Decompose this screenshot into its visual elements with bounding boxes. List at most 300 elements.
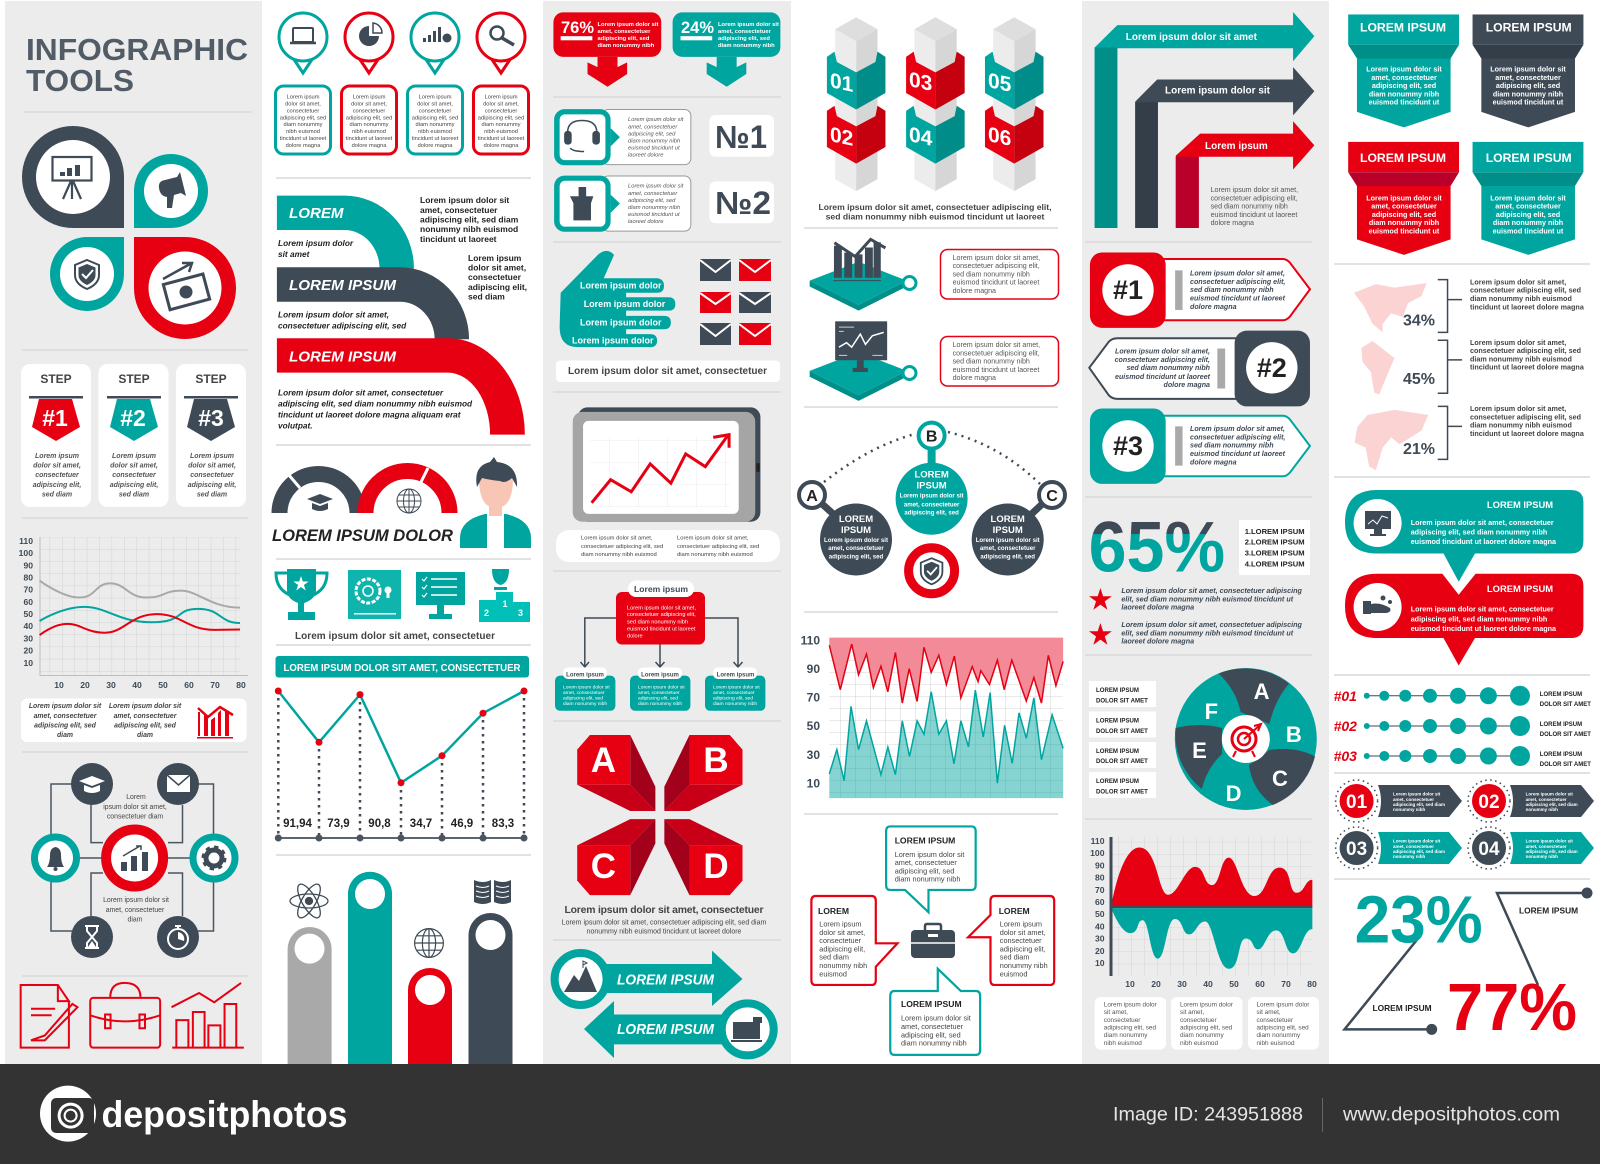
podium speaker card: amet, consectetuer xyxy=(628,191,678,197)
bent arrows: Lorem ipsum dolor sit amet xyxy=(1126,32,1258,43)
box 3 xyxy=(408,86,462,154)
banner dark: amet, consectetuer xyxy=(1495,73,1561,82)
callout 76%: 76% xyxy=(561,19,594,37)
box 4: tincidunt ut laoreet xyxy=(478,136,525,142)
ranked tag #1: euismod tincidunt ut laoreet xyxy=(1190,294,1286,302)
ABCD 3D blocks: D xyxy=(703,847,729,886)
podium speaker card: laoreet dolore xyxy=(628,219,664,225)
box 1: tincidunt ut laoreet xyxy=(280,136,327,142)
wave chart: 20 xyxy=(1095,946,1105,956)
tag 03: adipiscing elit, sed diam xyxy=(1393,849,1445,854)
icon: megaphone xyxy=(134,154,208,228)
box 4: consectetuer xyxy=(485,108,517,114)
ribbon body text: Lorem ipsum dolor sit xyxy=(420,195,509,205)
arches with person xyxy=(272,457,531,548)
node A: A xyxy=(806,488,818,505)
bubble bottom text: LOREM IPSUM xyxy=(901,999,962,1009)
text box: bar chart note: dolore magna xyxy=(953,287,996,295)
ribbon labels: LOREM IPSUM xyxy=(289,277,397,294)
line chart: 50 xyxy=(158,680,168,690)
bubble bottom text xyxy=(901,999,971,1048)
line chart: 20 xyxy=(80,680,90,690)
map statistics: 21% xyxy=(1403,441,1435,458)
wave chart captions: nibh euismod xyxy=(1180,1040,1218,1047)
step 1 card: consectetuer xyxy=(35,472,80,479)
callout: teal: adipiscing elit, sed diam nonummy nibh xyxy=(1411,527,1547,536)
banner teal 1: amet, consectetuer xyxy=(1371,73,1437,82)
area chart: 30 xyxy=(807,748,820,762)
bubble right text: LOREM xyxy=(999,906,1030,916)
wheel labels: DOLOR SIT AMET xyxy=(1096,728,1148,735)
tag 04: nonummy nibh xyxy=(1526,854,1558,859)
org chart head node: dolore xyxy=(627,633,643,639)
org chart child 3: diam nonummy nibh xyxy=(713,701,757,707)
isometric numbered towers: 04 xyxy=(909,123,933,151)
callout 76%: diam nonummy nibh xyxy=(598,43,655,49)
line chart: 60 xyxy=(23,597,33,607)
wheel labels xyxy=(1089,681,1156,798)
title xyxy=(26,32,248,98)
line chart: 30 xyxy=(106,680,116,690)
callout: teal xyxy=(1345,490,1583,582)
chart caption box: adipiscing elit, sed xyxy=(114,722,177,730)
bent arrows: dolore magna xyxy=(1211,219,1254,227)
org chart child 2: Lorem ipsum dolor sit xyxy=(638,684,685,690)
callout 76%: amet, consectetuer xyxy=(598,29,651,35)
dot timelines: #02 xyxy=(1334,718,1357,734)
text box: monitor note: Lorem ipsum dolor sit amet, xyxy=(953,341,1040,349)
wave chart: 60 xyxy=(1095,897,1105,907)
tablet caption strip xyxy=(556,530,780,562)
icon: globe xyxy=(415,929,443,957)
bubble top text: adipiscing elit, sed xyxy=(895,866,954,876)
podium speaker card: Lorem ipsum dolor sit xyxy=(628,184,684,190)
headset card: adipiscing elit, sed xyxy=(628,132,676,138)
wave chart: 80 xyxy=(1095,872,1105,882)
ranked tag #1: Lorem ipsum dolor sit amet, xyxy=(1190,270,1285,278)
wave chart captions: consectetuer xyxy=(1256,1017,1294,1024)
callout: red: adipiscing elit, sed diam nonummy nibh xyxy=(1411,614,1547,623)
org chart child 3: amet, consectetuer xyxy=(713,690,755,696)
ranked tag #3: euismod tincidunt ut laoreet xyxy=(1190,450,1286,458)
box 1: adipiscing elit, sed xyxy=(280,115,326,121)
box 3: diam nonummy xyxy=(416,122,455,128)
ranked tag #2: #2 xyxy=(1257,353,1287,383)
org chart child 3: Lorem ipsum dolor sit xyxy=(713,684,760,690)
chart caption box: adipiscing elit, sed xyxy=(34,722,97,730)
tablet caption strip: diam nonummy nibh euismod xyxy=(581,552,657,558)
callout: teal: Lorem ipsum dolor sit amet, consectetuer xyxy=(1411,518,1554,527)
ribbon labels: LOREM xyxy=(289,205,344,222)
banner dark: LOREM IPSUM xyxy=(1486,21,1572,35)
step 1 card: #1 xyxy=(42,405,68,431)
website url: www.depositphotos.com xyxy=(1342,1104,1560,1126)
wave chart: 20 xyxy=(1151,979,1161,989)
area chart: 10 xyxy=(807,777,820,791)
icon: target xyxy=(1232,724,1261,757)
bubble right text: Lorem ipsum xyxy=(1000,919,1042,928)
wave chart captions: Lorem ipsum dolor xyxy=(1104,1001,1158,1008)
caption strip xyxy=(556,360,780,382)
chart caption box: Lorem ipsum dolor sit xyxy=(109,703,182,710)
tag 01 xyxy=(1336,780,1462,822)
box 2: dolore magna xyxy=(352,143,387,149)
tag 03 xyxy=(1336,827,1462,869)
column 3 xyxy=(553,12,780,1058)
ranked tag #1: #1 xyxy=(1113,275,1143,305)
ribbon italic notes: sit amet xyxy=(278,249,311,259)
banner teal 2: adipiscing elit, sed xyxy=(1496,210,1560,219)
dark pill xyxy=(468,913,512,1064)
callout: teal: euismod tincidunt ut laoreet dolore magna xyxy=(1411,537,1557,546)
map statistics: Lorem ipsum dolor sit amet, xyxy=(1470,404,1566,413)
step 1 card: dolor sit amet, xyxy=(33,463,81,470)
step 3 card: #3 xyxy=(198,405,224,431)
text box: monitor note: consectetuer adipiscing elit, xyxy=(953,350,1040,358)
bubble left text: Lorem ipsum xyxy=(819,919,861,928)
box 4: adipiscing elit, sed xyxy=(478,115,524,121)
chart caption box: amet, consectetuer xyxy=(114,713,177,720)
map statistics: diam nonummy nibh euismod xyxy=(1470,421,1572,430)
hand with finger labels: Lorem ipsum dolor xyxy=(580,281,662,291)
wave chart captions xyxy=(1095,997,1319,1050)
ABCD 3D blocks: C xyxy=(591,847,616,886)
dot timelines: #03 xyxy=(1334,748,1357,764)
bent arrows: sed diam nonummy nibh xyxy=(1211,203,1288,211)
teal heading banner xyxy=(276,656,529,678)
isometric numbered towers: 06 xyxy=(988,123,1012,151)
banner teal 2: diam nonummy nibh xyxy=(1493,218,1563,227)
network diagram: diam xyxy=(128,916,143,924)
tablet caption strip: consectetuer adipiscing elit, sed xyxy=(581,544,663,550)
bubble left text: LOREM xyxy=(818,906,849,916)
dotted line chart: 83,3 xyxy=(492,818,514,830)
title: INFOGRAPHIC xyxy=(26,32,248,67)
petal icons cluster xyxy=(22,126,236,339)
tag 01: nonummy nibh xyxy=(1393,807,1425,812)
line chart: 10 xyxy=(54,680,64,690)
dotted line chart: 46,9 xyxy=(451,818,473,830)
hand with finger labels: Lorem ipsum dolor xyxy=(584,299,666,309)
dot timelines: DOLOR SIT AMET xyxy=(1540,732,1591,738)
ribbon italic notes xyxy=(278,238,473,430)
callout 76%: adipiscing elit, sed xyxy=(598,36,650,42)
banner red: adipiscing elit, sed xyxy=(1372,210,1436,219)
bubble bottom text: Lorem ipsum dolor sit xyxy=(901,1014,971,1022)
line chart: 90 xyxy=(23,560,33,570)
banner teal 1 xyxy=(1348,14,1459,127)
isometric numbered towers: 01 xyxy=(830,69,854,97)
dotted line chart: 34,7 xyxy=(410,818,432,830)
icon: presentation board xyxy=(22,126,124,228)
text box: monitor note: euismod tincidunt ut laoreet xyxy=(953,366,1039,374)
banner red: amet, consectetuer xyxy=(1371,202,1437,211)
org chart child 1: adipiscing elit, sed xyxy=(563,696,603,702)
pill bar chart xyxy=(288,872,512,1064)
node C: Lorem ipsum dolor sit xyxy=(976,537,1040,544)
ribbon body text: tincidunt ut laoreet xyxy=(420,234,497,244)
ranked tag #1 xyxy=(1090,252,1310,328)
step 2 card: sed diam xyxy=(119,492,149,498)
wheel labels: DOLOR SIT AMET xyxy=(1096,698,1148,704)
wave chart captions: diam nonummy xyxy=(1104,1032,1148,1039)
tag 04: 04 xyxy=(1478,839,1500,860)
org chart child 3 xyxy=(705,668,765,711)
chart caption box: amet, consectetuer xyxy=(34,713,97,720)
isometric plate: bar chart xyxy=(810,239,916,311)
ribbon body text: consectetuer xyxy=(468,272,522,282)
ribbon body text: nonummy nibh euismod xyxy=(420,224,518,234)
dot timelines: LOREM IPSUM xyxy=(1540,752,1582,758)
tag 02: amet, consectetuer xyxy=(1526,797,1567,802)
tag 03: Lorem ipsum dolor sit xyxy=(1393,839,1441,844)
headset card: laoreet dolore xyxy=(628,153,664,159)
box 4: nibh euismod xyxy=(484,129,518,135)
banner teal 2: amet, consectetuer xyxy=(1495,202,1561,211)
podium speaker card: euismod tincidunt ut xyxy=(628,212,680,218)
hand with finger labels: Lorem ipsum dolor xyxy=(580,318,662,328)
icon: envelope xyxy=(157,763,199,805)
text box: bar chart note: Lorem ipsum dolor sit amet, xyxy=(953,254,1040,262)
isometric numbered towers: 03 xyxy=(909,68,933,96)
map statistics: tincidunt ut laoreet dolore magna xyxy=(1470,302,1585,311)
org chart child 2 xyxy=(630,668,690,711)
wheel labels: LOREM IPSUM xyxy=(1096,748,1139,755)
bubble right text: consectetuer xyxy=(1000,936,1042,945)
ranked tag #2: consectetuer adipiscing elit, xyxy=(1115,356,1210,364)
footer band xyxy=(0,1064,1600,1164)
bubble right text: dolor sit amet, xyxy=(1000,928,1046,937)
org chart child 2: adipiscing elit, sed xyxy=(638,696,678,702)
list box: 4.LOREM IPSUM xyxy=(1245,560,1305,568)
area chart: 110 xyxy=(801,633,820,647)
wave chart captions: diam nonummy xyxy=(1180,1032,1224,1039)
map pin icons xyxy=(279,13,525,73)
text box: bar chart note: euismod tincidunt ut laoreet xyxy=(953,278,1039,286)
callout: red: Lorem ipsum dolor sit amet, consectetuer xyxy=(1411,605,1554,614)
node C xyxy=(972,482,1065,576)
icon: bell xyxy=(34,837,76,879)
caption strip: Lorem ipsum dolor sit amet, consectetuer xyxy=(568,366,767,377)
bent arrows: euismod tincidunt ut laoreet xyxy=(1211,211,1297,219)
bubble bottom text: adipiscing elit, sed xyxy=(901,1030,961,1040)
icon: checklist monitor xyxy=(416,572,465,619)
hand with finger labels: Lorem ipsum dolor xyxy=(572,336,654,346)
dot timelines: LOREM IPSUM xyxy=(1540,692,1582,698)
dot timelines xyxy=(1334,686,1591,768)
wheel labels: LOREM IPSUM xyxy=(1096,687,1139,694)
wheel labels: DOLOR SIT AMET xyxy=(1096,758,1148,765)
org chart child 3: adipiscing elit, sed xyxy=(713,696,753,702)
bubble left text: sed diam xyxy=(819,952,849,962)
text box: monitor note xyxy=(940,336,1058,386)
box 1 xyxy=(276,86,330,154)
ribbon body text: amet, consectetuer xyxy=(420,205,498,215)
wave chart xyxy=(1090,836,1317,989)
ribbon italic notes: Lorem ipsum dolor xyxy=(278,238,354,248)
ranked tag #1: sed diam nonummy nibh xyxy=(1190,286,1274,294)
wave chart: 50 xyxy=(1229,979,1239,989)
step 3 card: Lorem ipsum xyxy=(190,453,234,460)
tag 04: Lorem ipsum dolor sit xyxy=(1526,839,1573,844)
step 1 card xyxy=(21,364,91,507)
tag 02: nonummy nibh xyxy=(1526,807,1558,812)
line chart: 80 xyxy=(236,680,246,690)
step 2 card: #2 xyxy=(120,405,146,431)
bubble left text: adipiscing elit, xyxy=(819,944,865,953)
map statistics: 45% xyxy=(1403,371,1435,388)
step 3 card: adipiscing elit, xyxy=(188,482,236,489)
text box: bar chart note: consectetuer adipiscing elit, xyxy=(953,262,1040,270)
wave chart: 90 xyxy=(1095,860,1105,870)
isometric numbered towers: 02 xyxy=(830,123,853,151)
bent arrows: Lorem ipsum xyxy=(1205,141,1268,152)
icon: shield xyxy=(50,237,124,311)
icon: stopwatch xyxy=(157,916,199,958)
network diagram: ipsum dolor sit amet, xyxy=(103,804,167,811)
pie wheel A-F xyxy=(1175,668,1317,810)
banner dark: diam nonummy nibh xyxy=(1493,89,1563,98)
banner teal 2: LOREM IPSUM xyxy=(1486,151,1572,165)
bubble left text: dolor sit amet, xyxy=(819,928,865,937)
dotted line chart: 90,8 xyxy=(368,818,391,830)
dot timelines: DOLOR SIT AMET xyxy=(1540,702,1591,708)
banner red: Lorem ipsum dolor sit xyxy=(1366,193,1442,202)
dot timelines: #01 xyxy=(1334,688,1357,704)
tag 01: Lorem ipsum dolor sit xyxy=(1393,792,1441,797)
image id: Image ID: 243951888 xyxy=(1113,1104,1303,1126)
node C: IPSUM xyxy=(993,525,1023,536)
ranked tag #2: sed diam nonummy nibh xyxy=(1126,364,1211,372)
step 2 card: STEP xyxy=(118,372,150,386)
tag 04: amet, consectetuer xyxy=(1526,844,1567,849)
box 3: nibh euismod xyxy=(418,129,452,135)
ranked tag #3: sed diam nonummy nibh xyxy=(1190,442,1274,450)
bubble bottom text: diam nonummy nibh xyxy=(901,1039,967,1048)
area chart: 90 xyxy=(807,662,820,676)
caption: icon row: Lorem ipsum dolor sit amet, consectetuer xyxy=(295,631,495,642)
box 3: tincidunt ut laoreet xyxy=(412,136,459,142)
org chart child 1: diam nonummy nibh xyxy=(563,701,607,707)
area chart: 50 xyxy=(807,719,820,733)
icon: shield ring xyxy=(909,548,955,594)
wave chart: 30 xyxy=(1095,934,1105,944)
bubble left text: consectetuer xyxy=(819,936,862,945)
node B: amet, consectetuer xyxy=(904,501,960,508)
icon: graduation cap xyxy=(71,763,113,805)
icon: podium: 1 xyxy=(502,599,508,609)
org chart head node: consectetuer adipiscing elit, xyxy=(627,612,696,618)
network diagram: Lorem ipsum dolor sit xyxy=(103,897,169,904)
wave chart captions: nibh euismod xyxy=(1256,1040,1295,1047)
banner dark: euismod tincidunt ut xyxy=(1493,98,1564,107)
icon: safe xyxy=(348,570,401,619)
icon: atom xyxy=(290,881,328,921)
bent arrows: consectetuer adipiscing elit, xyxy=(1211,194,1298,202)
pie wheel A-F: D xyxy=(1226,781,1242,806)
box 2 xyxy=(342,86,396,154)
ribbon body text: sed diam xyxy=(468,292,505,302)
tag 02 xyxy=(1468,780,1594,822)
box 2: dolor sit amet, xyxy=(351,102,387,108)
red pill xyxy=(408,968,452,1064)
percent comparison: LOREM IPSUM xyxy=(1372,1003,1432,1013)
org chart child 1: amet, consectetuer xyxy=(563,690,605,696)
numbered arrow tags xyxy=(1336,780,1594,869)
logo wordmark: depositphotos xyxy=(102,1094,348,1135)
icon: podium xyxy=(479,569,530,622)
ribbon body text: dolor sit amet, xyxy=(468,263,526,273)
list box: 1.LOREM IPSUM xyxy=(1245,527,1305,536)
ranked tag #2 xyxy=(1089,331,1310,406)
column 2 xyxy=(272,13,531,1064)
ABC circle diagram xyxy=(799,423,1065,594)
tag 03: 03 xyxy=(1346,839,1367,860)
banner teal 1: diam nonummy nibh xyxy=(1369,89,1439,98)
bubble bottom text: amet, consectetuer xyxy=(901,1022,964,1031)
podium speaker card: diam nonummy nibh xyxy=(628,205,680,211)
map statistics: tincidunt ut laoreet dolore magna xyxy=(1470,429,1585,438)
wave chart captions: consectetuer xyxy=(1180,1017,1217,1024)
tag 04 xyxy=(1468,827,1594,869)
callout 76% xyxy=(553,12,661,87)
wave chart: 60 xyxy=(1255,979,1265,989)
tablet caption strip: Lorem ipsum dolor sit amet, xyxy=(581,536,653,542)
wave chart captions: Lorem ipsum dolor xyxy=(1180,1001,1234,1008)
org chart head node xyxy=(616,580,705,644)
step 3 card xyxy=(176,364,246,507)
banner red: euismod tincidunt ut xyxy=(1369,226,1440,236)
dotted line chart xyxy=(275,688,528,842)
number badge 2: №2 xyxy=(715,185,771,221)
node A: adipiscing elit, sed xyxy=(829,554,884,560)
ranked tag #2: Lorem ipsum dolor sit amet, xyxy=(1115,348,1210,356)
percent comparison: LOREM IPSUM xyxy=(1519,905,1578,915)
tablet with growth chart xyxy=(573,407,760,522)
network diagram: consectetuer diam xyxy=(107,814,163,821)
step 2 card: Lorem ipsum xyxy=(112,453,156,460)
wave chart: 70 xyxy=(1281,979,1291,989)
org chart head node: euismod tincidunt ut laoreet xyxy=(627,626,696,632)
tag 01: adipiscing elit, sed diam xyxy=(1393,802,1445,807)
map statistics: consectetuer adipiscing elit, sed xyxy=(1470,412,1581,422)
line chart: 40 xyxy=(23,621,33,631)
column 5 xyxy=(1089,12,1319,1050)
callout: teal: LOREM IPSUM xyxy=(1487,499,1553,510)
tag 04: adipiscing elit, sed diam xyxy=(1526,849,1578,854)
ribbon body text: adipiscing elit, xyxy=(468,282,527,292)
text box: monitor note: dolore magna xyxy=(953,374,996,382)
star notes: laoreet dolore magna xyxy=(1121,637,1194,646)
node B: LOREM xyxy=(914,470,949,481)
line chart: 40 xyxy=(132,680,142,690)
node B xyxy=(896,423,968,535)
org chart head node: sed diam nonummy nibh xyxy=(627,620,688,626)
isometric plate: monitor xyxy=(810,321,916,401)
wave chart captions: adipiscing elit, sed xyxy=(1104,1024,1156,1031)
node C: C xyxy=(1046,488,1058,505)
line chart: 70 xyxy=(210,680,220,690)
step 3 card: consectetuer xyxy=(190,472,235,479)
callout 24%: diam nonummy nibh xyxy=(718,43,775,49)
person avatar xyxy=(460,457,531,548)
banner teal 1: adipiscing elit, sed xyxy=(1372,81,1436,90)
network diagram: Lorem xyxy=(126,794,146,801)
callout 24%: amet, consectetuer xyxy=(718,29,772,35)
isometric numbered towers xyxy=(827,17,1044,191)
network diagram: amet, consectetuer xyxy=(106,907,165,914)
percent comparison: 23% xyxy=(1355,882,1483,958)
